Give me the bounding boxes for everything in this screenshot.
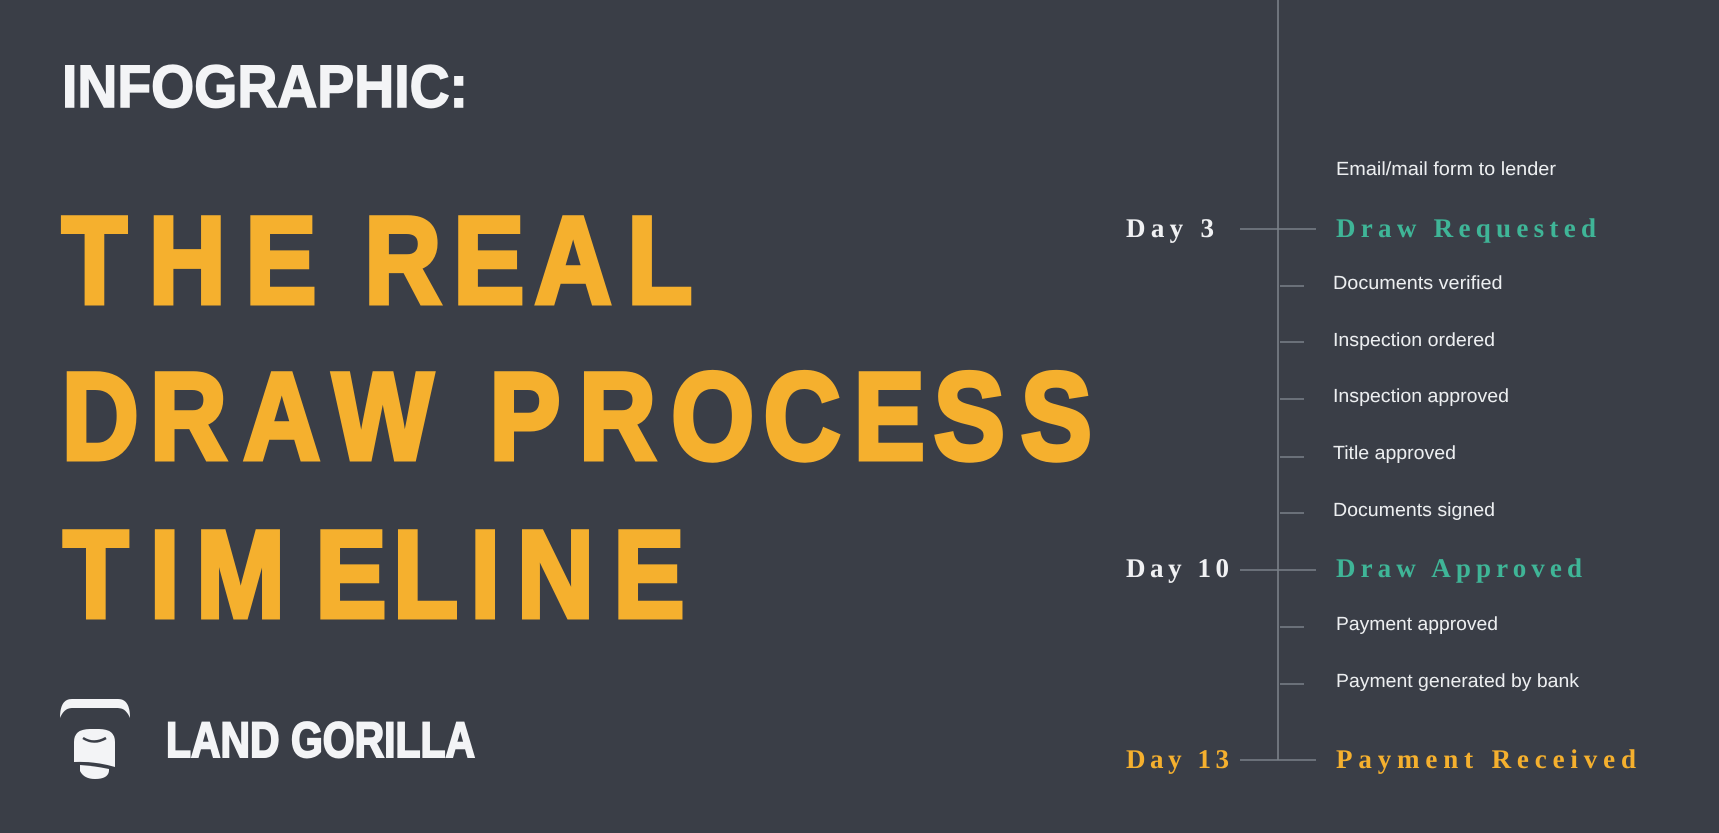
step: Inspection ordered: Inspection ordered (1333, 330, 1495, 351)
step: Payment approved: Payment approved (1336, 614, 1498, 635)
eyebrow heading: INFOGRAPHIC: INFOGRAPHIC: (62, 53, 468, 120)
brand logo (60, 699, 475, 779)
milestone: Payment Received: Payment Received (1336, 744, 1636, 774)
day label: Day 10: Day 10 (1126, 553, 1229, 583)
timeline axis and ticks (1240, 0, 1316, 760)
title line 2: DRAW PROCESS (62, 348, 1092, 486)
step: Title approved: Title approved (1333, 443, 1456, 464)
step: Documents signed: Documents signed (1333, 500, 1495, 521)
day label: Day 3: Day 3 (1126, 213, 1214, 243)
step: Email/mail form to lender: Email/mail form to lender (1336, 159, 1557, 180)
main title (62, 192, 1092, 644)
step: Inspection approved: Inspection approved (1333, 386, 1509, 407)
day label: Day 13: Day 13 (1126, 744, 1229, 774)
milestone: Draw Requested: Draw Requested (1336, 213, 1596, 243)
title line 1: THE REAL (62, 192, 692, 330)
wordmark: LAND GORILLA: LAND GORILLA (166, 712, 475, 768)
milestone: Draw Approved: Draw Approved (1336, 553, 1582, 583)
title line 3: TIMELINE (63, 506, 684, 644)
step: Payment generated by bank: Payment generated by bank (1336, 671, 1579, 692)
step: Documents verified: Documents verified (1333, 273, 1502, 294)
icon: gorilla head (60, 699, 130, 779)
